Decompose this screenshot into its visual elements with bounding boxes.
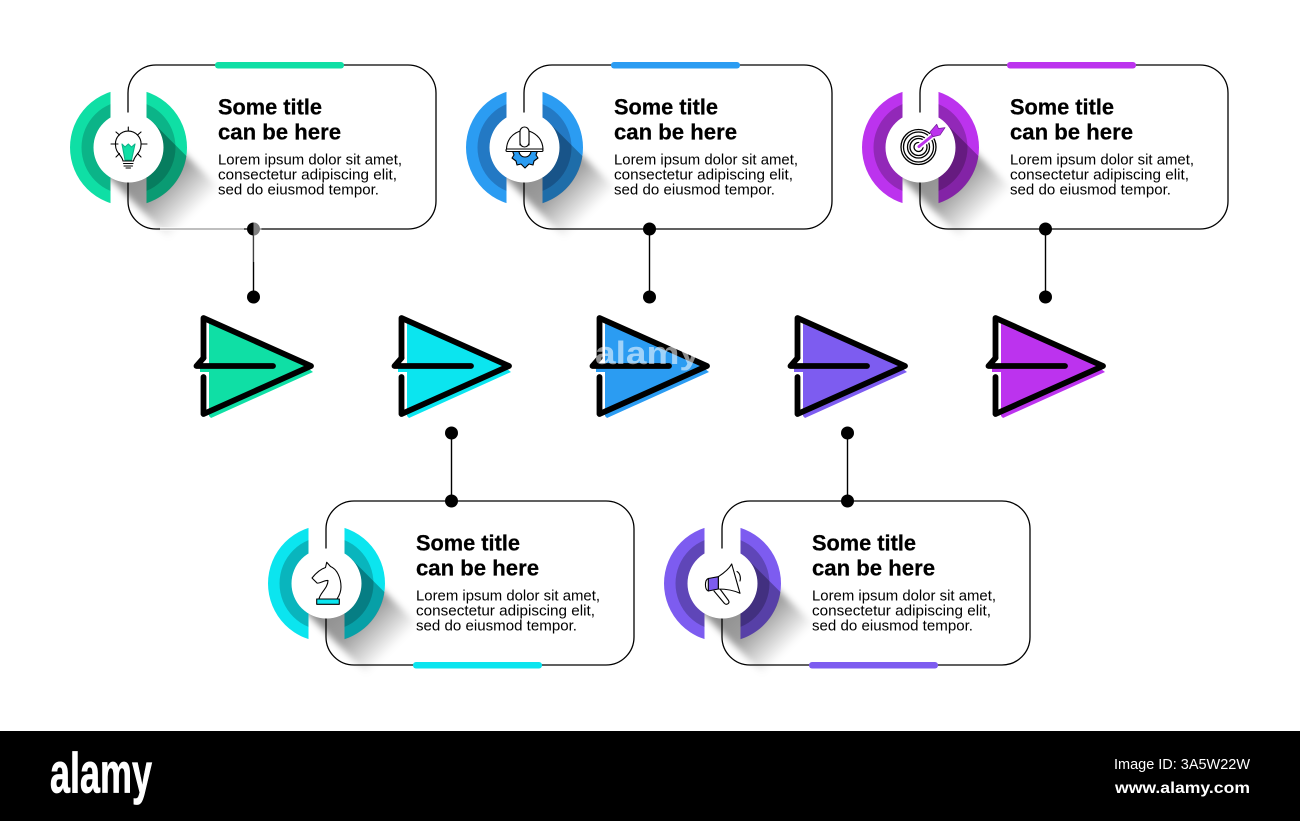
icon: chess knight [312, 562, 341, 604]
title: Some title [812, 530, 916, 556]
icon disc [490, 112, 560, 182]
accent bar [413, 662, 542, 668]
accent bar [809, 662, 938, 668]
icon disc [292, 548, 362, 618]
accent bar [611, 62, 740, 68]
watermark over blue arrow: alamy [595, 335, 700, 371]
panel: step 3 helmet card [466, 62, 832, 248]
panel: step 1 lightbulb card: sed do eiusmod tempor. [218, 182, 379, 198]
title: Some title [614, 94, 718, 120]
ring: green [70, 92, 214, 234]
panel: step 2 knight card: consectetur adipiscing elit, [416, 604, 595, 620]
arrow: cyan paper plane [394, 318, 511, 418]
panel: step 5 target card: consectetur adipiscing elit, [1010, 168, 1189, 184]
title: Some title [416, 530, 520, 556]
card outline [326, 501, 634, 665]
card outline [722, 501, 1030, 665]
panel: step 4 megaphone card: sed do eiusmod tempor. [812, 618, 973, 634]
arrow: magenta paper plane [988, 318, 1105, 418]
panel: step 5 target card: sed do eiusmod tempor. [1010, 182, 1171, 198]
panel: step 2 knight card [268, 501, 634, 684]
footer band [0, 731, 1300, 821]
ring: blue [466, 92, 610, 234]
icon: target with dart [901, 124, 945, 164]
icon disc [886, 112, 956, 182]
title: Some title [1010, 94, 1114, 120]
body text: Lorem ipsum dolor sit amet, [416, 588, 600, 604]
accent bar [1007, 62, 1136, 68]
title: Some title [218, 94, 322, 120]
icon disc [688, 548, 758, 618]
connector: step 4 [841, 426, 854, 508]
card outline [920, 65, 1228, 229]
panel: step 4 megaphone card [664, 501, 1030, 684]
panel: step 1 lightbulb card [70, 62, 436, 248]
connector: step 3 [643, 222, 656, 304]
arrow: purple paper plane [790, 318, 907, 418]
icon: helmet with gear [506, 127, 543, 168]
panel: step 4 megaphone card: consectetur adipiscing elit, [812, 604, 991, 620]
image id: Image ID: 3A5W22W [1114, 756, 1251, 773]
connector: step 5 [1039, 222, 1052, 304]
icon: megaphone [705, 564, 740, 604]
panel: step 2 knight card: can be here [416, 556, 539, 580]
body text: Lorem ipsum dolor sit amet, [812, 588, 996, 604]
card outline [524, 65, 832, 229]
footer logo: alamy [50, 742, 152, 806]
panel: step 1 lightbulb card: consectetur adipiscing elit, [218, 168, 397, 184]
panel: step 2 knight card: sed do eiusmod tempor. [416, 618, 577, 634]
panel: step 5 target card [862, 62, 1228, 248]
panel: step 3 helmet card: sed do eiusmod tempor. [614, 182, 775, 198]
arrow: blue paper plane [592, 318, 709, 418]
accent bar [215, 62, 344, 68]
body text: Lorem ipsum dolor sit amet, [1010, 152, 1194, 168]
arrow: green paper plane [196, 318, 313, 418]
icon: lightbulb [111, 127, 147, 168]
body text: Lorem ipsum dolor sit amet, [614, 152, 798, 168]
panel: step 3 helmet card: can be here [614, 120, 737, 144]
ring: magenta [862, 92, 1006, 234]
ring: purple [664, 528, 808, 670]
connector: step 2 [445, 426, 458, 508]
icon disc [94, 112, 164, 182]
connector: step 1 [160, 222, 262, 304]
ring: cyan [268, 528, 412, 670]
panel: step 5 target card: can be here [1010, 120, 1133, 144]
website: www.alamy.com [1114, 780, 1250, 797]
body text: Lorem ipsum dolor sit amet, [218, 152, 402, 168]
card outline [128, 65, 436, 229]
panel: step 4 megaphone card: can be here [812, 556, 935, 580]
panel: step 1 lightbulb card: can be here [218, 120, 341, 144]
panel: step 3 helmet card: consectetur adipiscing elit, [614, 168, 793, 184]
